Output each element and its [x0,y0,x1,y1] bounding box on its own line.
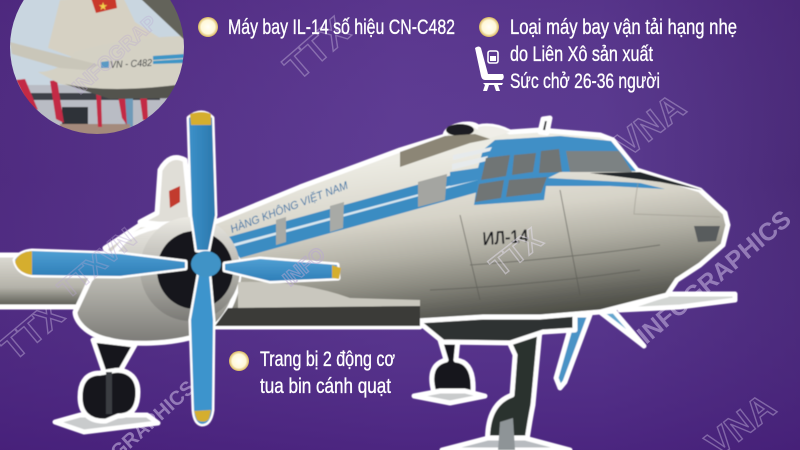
fin [48,0,160,60]
text: registration: Máy bay IL-14 số hiệu CN-C482 [228,16,455,39]
cockpit windows [475,149,632,202]
text: aircraft type [510,16,737,93]
left blade [15,251,185,276]
nose gear hub [498,418,515,450]
bullet: engines [229,351,249,371]
text: engines: Trang bị 2 động cơ [260,348,395,371]
nose cone seam [634,183,720,217]
watermarks over plane: TTXVN [52,222,142,305]
registration text: VN - C482 [110,58,153,71]
text: engines [260,348,395,398]
silhouette with white outline [0,118,735,450]
left gear strut [93,340,135,375]
nose window [694,226,720,242]
text: aircraft type: do Liên Xô sản xuất [510,43,653,66]
dome on roof [446,124,474,136]
roof fairing [478,126,510,138]
engine cowling ring [140,217,240,321]
propeller [15,112,341,424]
watermarks over plane: INFOGRAP [69,12,162,99]
cabin windows [330,202,344,232]
flag: ★ [98,0,108,13]
lower blade [191,275,213,424]
far propeller blades [556,315,590,388]
blue cheatline [225,168,478,258]
bullet: registration [198,17,218,37]
tail flag [169,186,180,208]
centre gear [432,340,473,393]
propeller outline [15,113,338,424]
terminal building [21,84,168,134]
watermarks behind plane: VNA [608,85,693,164]
right blade [225,259,338,281]
watermarks over plane [52,12,549,305]
underbody [410,310,575,343]
text: aircraft type: Sức chở 26-36 người [510,70,660,93]
flag [91,0,117,13]
upper blade [189,113,215,250]
airline name: HÀNG KHÔNG VIỆT NAM [228,179,351,236]
text: aircraft type: Loại máy bay vận tải hạng nhẹ [510,16,737,39]
inset corner wing [141,0,184,40]
antenna [540,118,550,133]
wing [0,255,420,327]
bullet: aircraft type [479,17,499,37]
left wheel gap detail [106,372,112,414]
wing root shadow [215,306,420,326]
text: engines: tua bin cánh quạt [260,375,391,398]
far wing tip [620,294,735,310]
nose stripes [453,147,492,160]
roof panel [400,134,490,167]
left wheels [80,370,138,421]
red banners [16,79,148,127]
hub [191,251,221,277]
left gear plate [55,415,158,432]
nacelle [75,225,240,343]
aircraft type lettering: ИЛ-14 [482,226,529,249]
icon: passenger seat [475,46,504,91]
rear fuselage [39,36,184,90]
cockpit blue band [450,136,665,205]
windscreen dark strip [590,172,702,190]
fin [140,158,192,228]
fuselage [105,124,728,327]
watermarks over plane: INFO [279,243,330,291]
nose gear [488,318,541,450]
tailplane [10,42,100,70]
watermarks behind plane: INFOGRAPHICS [632,205,797,350]
inset photo: aircraft tail with registration [10,0,184,134]
fuselage seams [430,190,660,300]
wing root light surface [238,282,420,310]
watermarks over plane: TTX [484,223,549,284]
engine intake [157,231,233,309]
watermarks behind plane: TTX [276,10,359,89]
aircraft [0,112,735,450]
registration stripe [101,61,109,68]
